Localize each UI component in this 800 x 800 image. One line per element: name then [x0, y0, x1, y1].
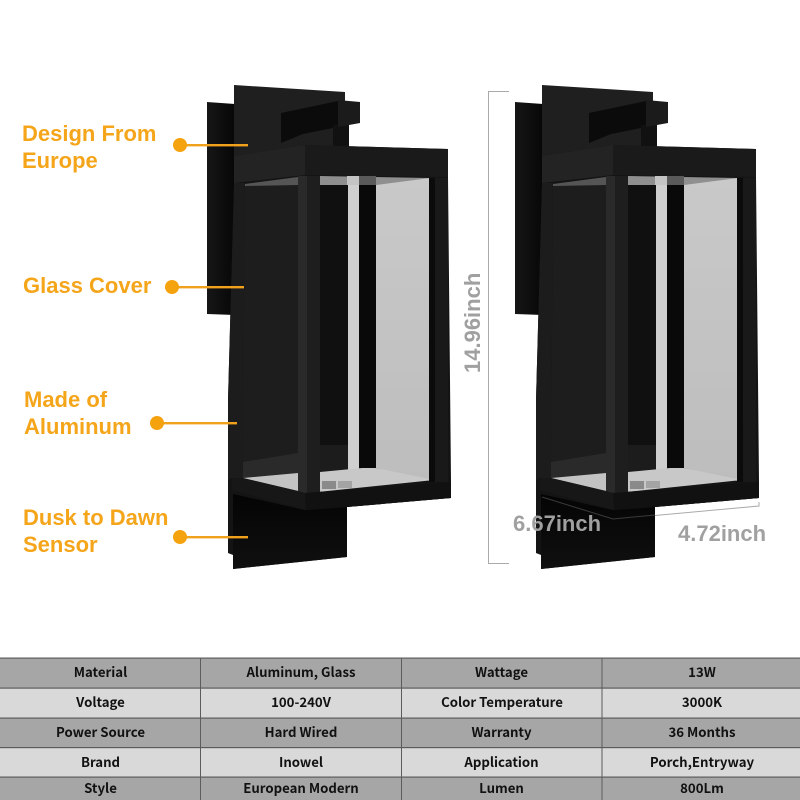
table row: brand and application — [81, 752, 755, 771]
table row: brand and application: Inowel — [279, 752, 323, 771]
dimension: width 4.72inch — [655, 502, 766, 546]
specification table — [0, 658, 800, 800]
table row: voltage and color temperature — [75, 692, 723, 711]
table row: material and wattage: 13W — [688, 662, 716, 681]
left lantern photo — [207, 85, 451, 569]
dimension: width 4.72inch: 4.72inch — [678, 521, 766, 546]
callout: Design From Europe — [22, 121, 248, 173]
callout: Made of Aluminum: Made of — [24, 387, 108, 412]
table row: power source and warranty: Power Source — [56, 722, 145, 741]
dimension: height 14.96inch — [460, 92, 509, 564]
callout: Design From Europe: Design From — [22, 121, 156, 146]
callout: Dusk to Dawn Sensor — [23, 505, 248, 557]
table row: style and lumen: Lumen — [479, 778, 524, 797]
table row: brand and application: Brand — [81, 752, 120, 771]
table row: style and lumen: Style — [84, 778, 117, 797]
dimension: depth 6.67inch — [513, 497, 655, 536]
callout: Glass Cover: Glass Cover — [23, 273, 152, 298]
table row: voltage and color temperature: Color Temperature — [441, 692, 563, 711]
table row: style and lumen: 800Lm — [680, 778, 724, 797]
table row: power source and warranty: Hard Wired — [265, 722, 337, 741]
table row: voltage and color temperature: 3000K — [682, 692, 723, 711]
table row: material and wattage: Wattage — [475, 662, 528, 681]
table row: style and lumen — [84, 778, 724, 797]
right lantern photo — [515, 85, 759, 569]
table row: material and wattage — [74, 662, 716, 681]
callout: Made of Aluminum — [24, 387, 237, 439]
table row: material and wattage: Aluminum, Glass — [245, 662, 356, 681]
table row: power source and warranty: Warranty — [471, 722, 532, 741]
table row: brand and application: Porch,Entryway — [650, 752, 755, 771]
table row: brand and application: Application — [463, 752, 539, 771]
dimension: height 14.96inch: 14.96inch — [460, 273, 485, 373]
dimension: depth 6.67inch: 6.67inch — [513, 511, 601, 536]
table row: style and lumen: European Modern — [243, 778, 359, 797]
table row: material and wattage: Material — [74, 662, 127, 681]
callout: Made of Aluminum: Aluminum — [24, 414, 132, 439]
table row: power source and warranty — [56, 722, 736, 741]
callout: Dusk to Dawn Sensor: Dusk to Dawn — [23, 505, 168, 530]
callout: Dusk to Dawn Sensor: Sensor — [23, 532, 98, 557]
table row: voltage and color temperature: 100-240V — [271, 692, 332, 711]
callout: Design From Europe: Europe — [22, 148, 98, 173]
table row: power source and warranty: 36 Months — [668, 722, 736, 741]
callout: Glass Cover — [23, 273, 244, 298]
table row: voltage and color temperature: Voltage — [75, 692, 125, 711]
